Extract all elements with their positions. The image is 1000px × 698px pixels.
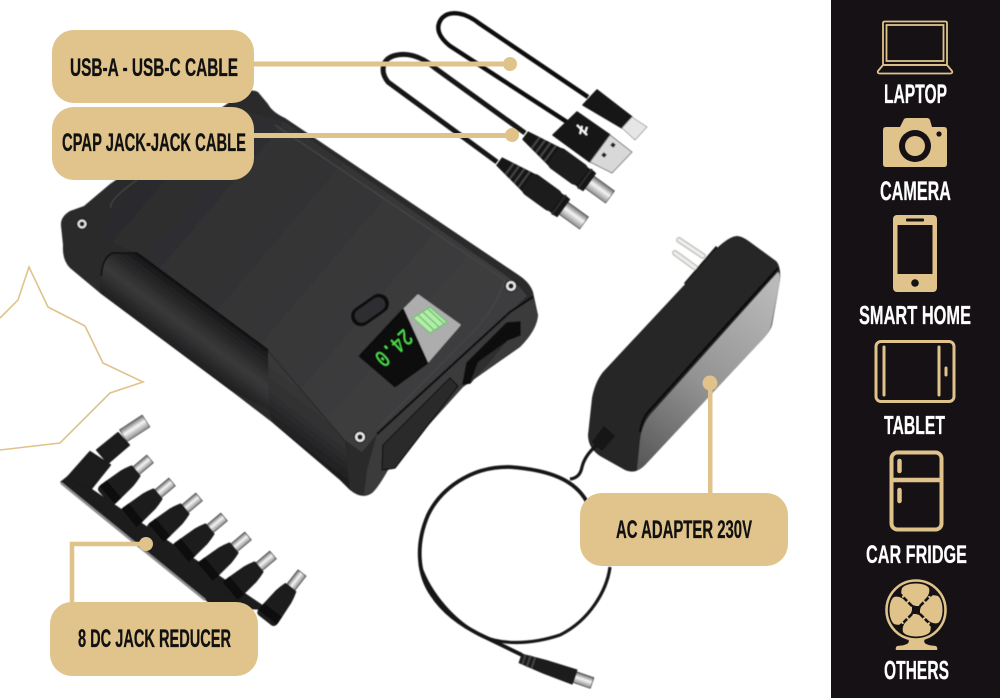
port cover bbox=[382, 378, 458, 470]
label: tablet: TABLET bbox=[884, 412, 945, 440]
DC jack reducer set bbox=[60, 415, 311, 628]
power bank bbox=[61, 91, 538, 496]
right side edge bbox=[364, 298, 538, 495]
side grip band bbox=[100, 253, 270, 410]
screen glass bbox=[403, 295, 460, 363]
panel: compatible devices bbox=[831, 0, 1000, 698]
inner panel line bbox=[111, 125, 505, 428]
USB-C head bbox=[583, 90, 632, 128]
power bank body bbox=[61, 91, 538, 496]
screen black bbox=[360, 310, 427, 386]
callout: CPAP jack-jack cable: CPAP JACK-JACK CABLE bbox=[62, 129, 246, 157]
lower jack bbox=[492, 152, 591, 233]
icon: car fridge bbox=[891, 452, 942, 530]
port flap bbox=[463, 322, 520, 384]
callout: AC adapter bbox=[580, 376, 788, 566]
screen readout: 24.0 bbox=[368, 322, 417, 371]
icon: camera bbox=[883, 118, 947, 167]
large reducer tip bbox=[120, 415, 150, 442]
icon: fan bbox=[886, 580, 946, 650]
AC adapter bbox=[420, 236, 780, 691]
battery indicator bbox=[413, 307, 447, 333]
CPAP cable bbox=[383, 54, 617, 233]
adapter edge bbox=[640, 268, 778, 432]
label: camera: CAMERA bbox=[880, 176, 951, 206]
decorative outline bbox=[0, 267, 143, 450]
label: others: OTHERS bbox=[884, 657, 949, 685]
label: laptop: LAPTOP bbox=[884, 79, 947, 109]
power button bbox=[347, 290, 393, 330]
upper jack bbox=[518, 126, 617, 207]
large reducer body bbox=[67, 433, 129, 490]
top face bbox=[84, 110, 527, 452]
reducer rail bbox=[60, 474, 270, 610]
callout: DC jack reducer: 8 DC JACK REDUCER bbox=[78, 625, 231, 653]
callout: USB-A - USB-C cable bbox=[52, 30, 517, 103]
USB cable bbox=[438, 13, 647, 173]
callout: CPAP jack-jack cable bbox=[52, 107, 519, 180]
adapter cover bbox=[588, 236, 780, 472]
DC plug bbox=[518, 651, 595, 691]
plug base bbox=[685, 247, 720, 287]
callout: AC adapter: AC ADAPTER 230V bbox=[616, 516, 752, 544]
adapter grey side bbox=[637, 272, 780, 470]
plug prongs bbox=[675, 240, 703, 269]
USB-A head bbox=[553, 112, 610, 162]
icon: tablet bbox=[876, 342, 954, 402]
icon: smart phone bbox=[893, 215, 937, 292]
icon: laptop bbox=[878, 22, 952, 74]
reducer tips bbox=[96, 450, 311, 628]
callout: DC jack reducer bbox=[50, 537, 258, 676]
flat cable loop bbox=[420, 445, 610, 655]
screws bbox=[77, 219, 516, 442]
callout: USB-A - USB-C cable: USB-A - USB-C CABLE bbox=[70, 54, 238, 82]
lower corner block bbox=[268, 352, 350, 490]
strain relief bbox=[593, 427, 614, 450]
